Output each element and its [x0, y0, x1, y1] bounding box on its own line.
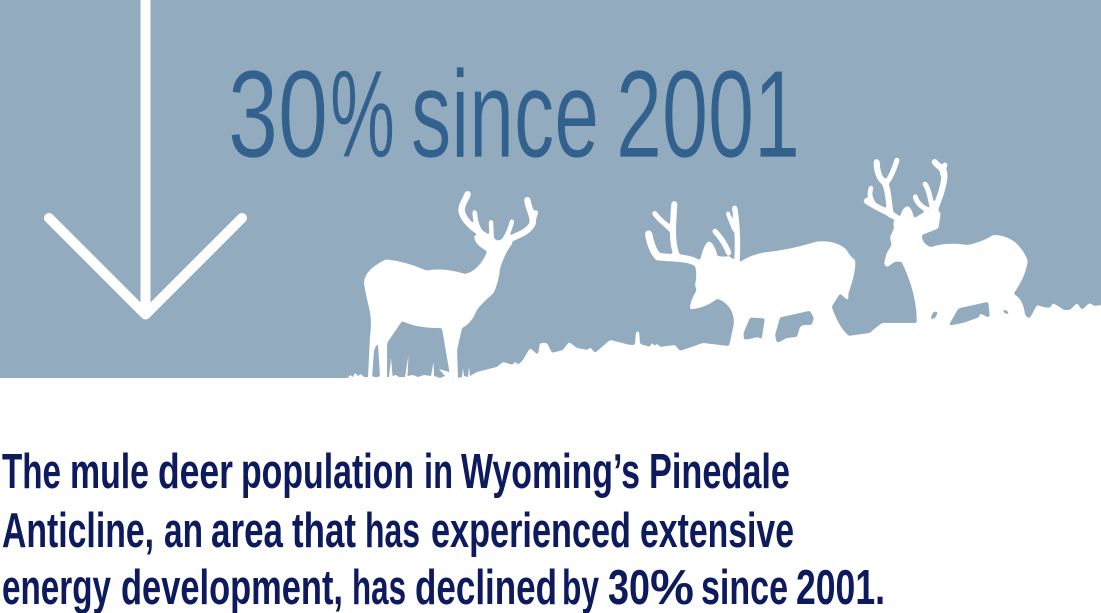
line 1: mule: [70, 445, 149, 499]
line 2: an: [164, 504, 203, 558]
line 1: The: [2, 445, 61, 499]
grass blades: [347, 355, 480, 380]
deer and ground silhouettes: [364, 160, 1101, 400]
line 2: extensive: [640, 504, 794, 558]
heading: 30% since 2001: since: [411, 46, 599, 184]
heading: 30% since 2001: %: [330, 46, 395, 184]
line 2: [2, 504, 794, 558]
line 1: deer: [158, 445, 233, 499]
heading: 30% since 2001: 2001: [616, 46, 800, 184]
line 2: area: [211, 504, 284, 558]
text block: description: [2, 445, 885, 613]
heading: 30% since 2001: 30: [228, 46, 328, 184]
panel: blue background: [0, 0, 1101, 378]
line 1: in: [424, 445, 453, 499]
ground: [470, 303, 1101, 400]
deer: middle, grazing: [649, 204, 855, 350]
line 2: experienced: [431, 504, 631, 558]
line 3: [2, 561, 885, 613]
line 1: Pinedale: [649, 445, 790, 499]
line 2: has: [365, 504, 420, 558]
line 1: Wyoming’s: [461, 445, 640, 499]
deer: left, standing: [364, 194, 536, 380]
line 2: that: [292, 504, 356, 558]
icon: down arrow: [49, 0, 242, 314]
line 1: [2, 445, 790, 499]
line 1: population: [241, 445, 414, 499]
deer: right, facing viewer: [867, 160, 1030, 330]
line 2: Anticline,: [2, 504, 154, 558]
heading: 30% since 2001: [228, 46, 800, 184]
